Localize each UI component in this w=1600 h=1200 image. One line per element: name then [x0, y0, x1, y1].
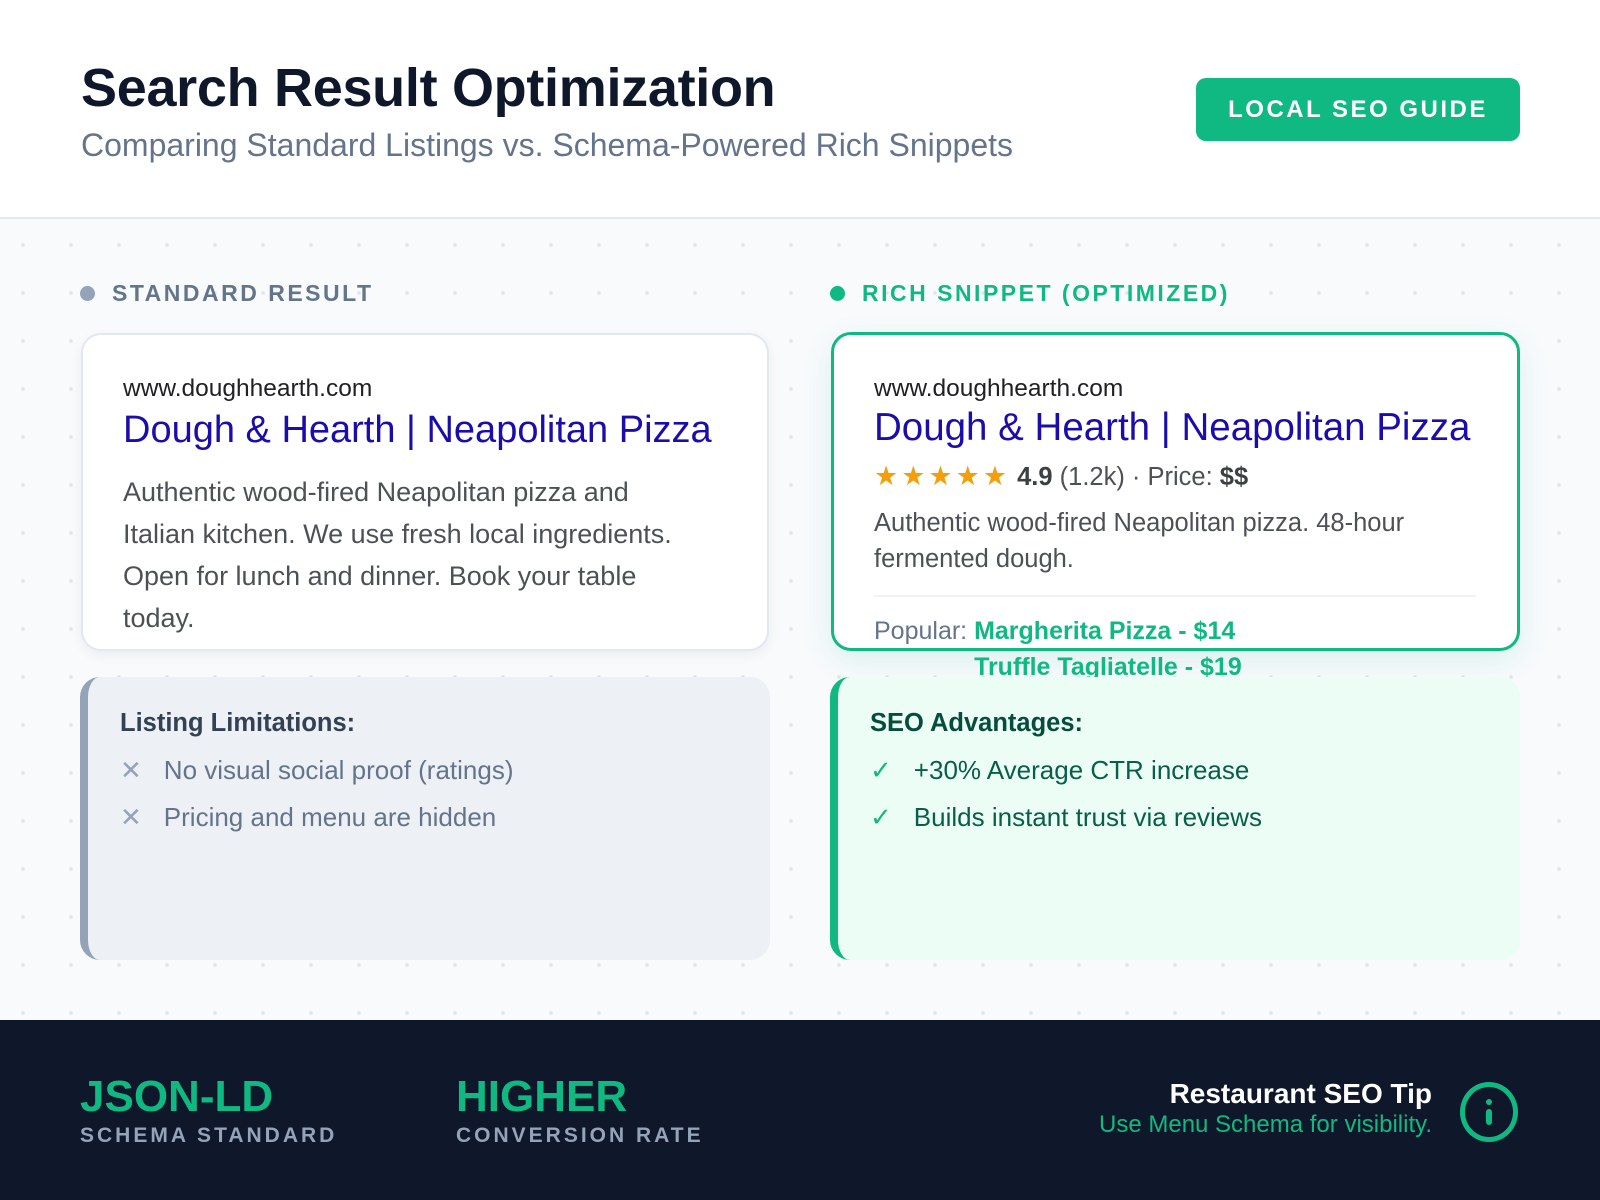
- url: www.doughhearth.com: [123, 375, 372, 402]
- divider + popular items: Margherita Pizza - $14: [974, 617, 1235, 645]
- badge: [1196, 78, 1520, 141]
- item: ✓ Builds instant trust via reviews: [870, 802, 1262, 832]
- panel: rich snippet card: [831, 332, 1520, 651]
- tip text: Restaurant SEO Tip: [1170, 1078, 1432, 1109]
- panel: seo advantages: [830, 677, 1520, 960]
- link title: Dough & Hearth | Neapolitan Pizza: [874, 406, 1470, 449]
- url: www.doughhearth.com: [874, 375, 1123, 402]
- divider + popular items: Popular:: [874, 617, 967, 645]
- stat: higher: [456, 1072, 704, 1147]
- link title: Dough & Hearth | Neapolitan Pizza: [123, 409, 712, 451]
- label: rich snippet: RICH SNIPPET (OPTIMIZED): [862, 280, 1230, 306]
- stat: json-ld: SCHEMA STANDARD: [80, 1124, 337, 1147]
- heading: Listing Limitations:: [120, 709, 355, 737]
- description: Authentic wood-fired Neapolitan pizza and Italian kitchen. We use fresh local ingredients. Open for lunch and dinner. Book your table today.: [123, 477, 672, 633]
- divider + popular items: Truffle Tagliatelle - $19: [974, 653, 1242, 681]
- description: Authentic wood-fired Neapolitan pizza. 48-hour fermented dough.: [874, 509, 1404, 573]
- stat: json-ld: [80, 1072, 337, 1147]
- item: ✕ No visual social proof (ratings): [120, 755, 514, 785]
- label: standard result: STANDARD RESULT: [112, 280, 374, 306]
- title: Search Result Optimization: [81, 58, 775, 118]
- header: [0, 0, 1600, 219]
- panel: standard listing card: [81, 333, 769, 651]
- stat: higher: CONVERSION RATE: [456, 1124, 704, 1147]
- subtitle: Comparing Standard Listings vs. Schema-Powered Rich Snippets: [81, 127, 1013, 163]
- rating row: ★★★★★ 4.9 (1.2k) · Price: $$: [874, 461, 1248, 491]
- badge: LOCAL SEO GUIDE: [1228, 96, 1488, 123]
- footer: [0, 1020, 1600, 1200]
- stat: json-ld: JSON-LD: [80, 1072, 273, 1121]
- item: ✕ Pricing and menu are hidden: [120, 802, 496, 832]
- item: ✓ +30% Average CTR increase: [870, 755, 1249, 785]
- stat: higher: HIGHER: [456, 1072, 627, 1121]
- tip text: Use Menu Schema for visibility.: [1099, 1111, 1432, 1138]
- heading: SEO Advantages:: [870, 709, 1083, 737]
- panel: listing limitations: [80, 677, 770, 960]
- icon: info: [1460, 1082, 1518, 1142]
- tip text: [1099, 1078, 1432, 1138]
- divider + popular items: [874, 595, 1476, 685]
